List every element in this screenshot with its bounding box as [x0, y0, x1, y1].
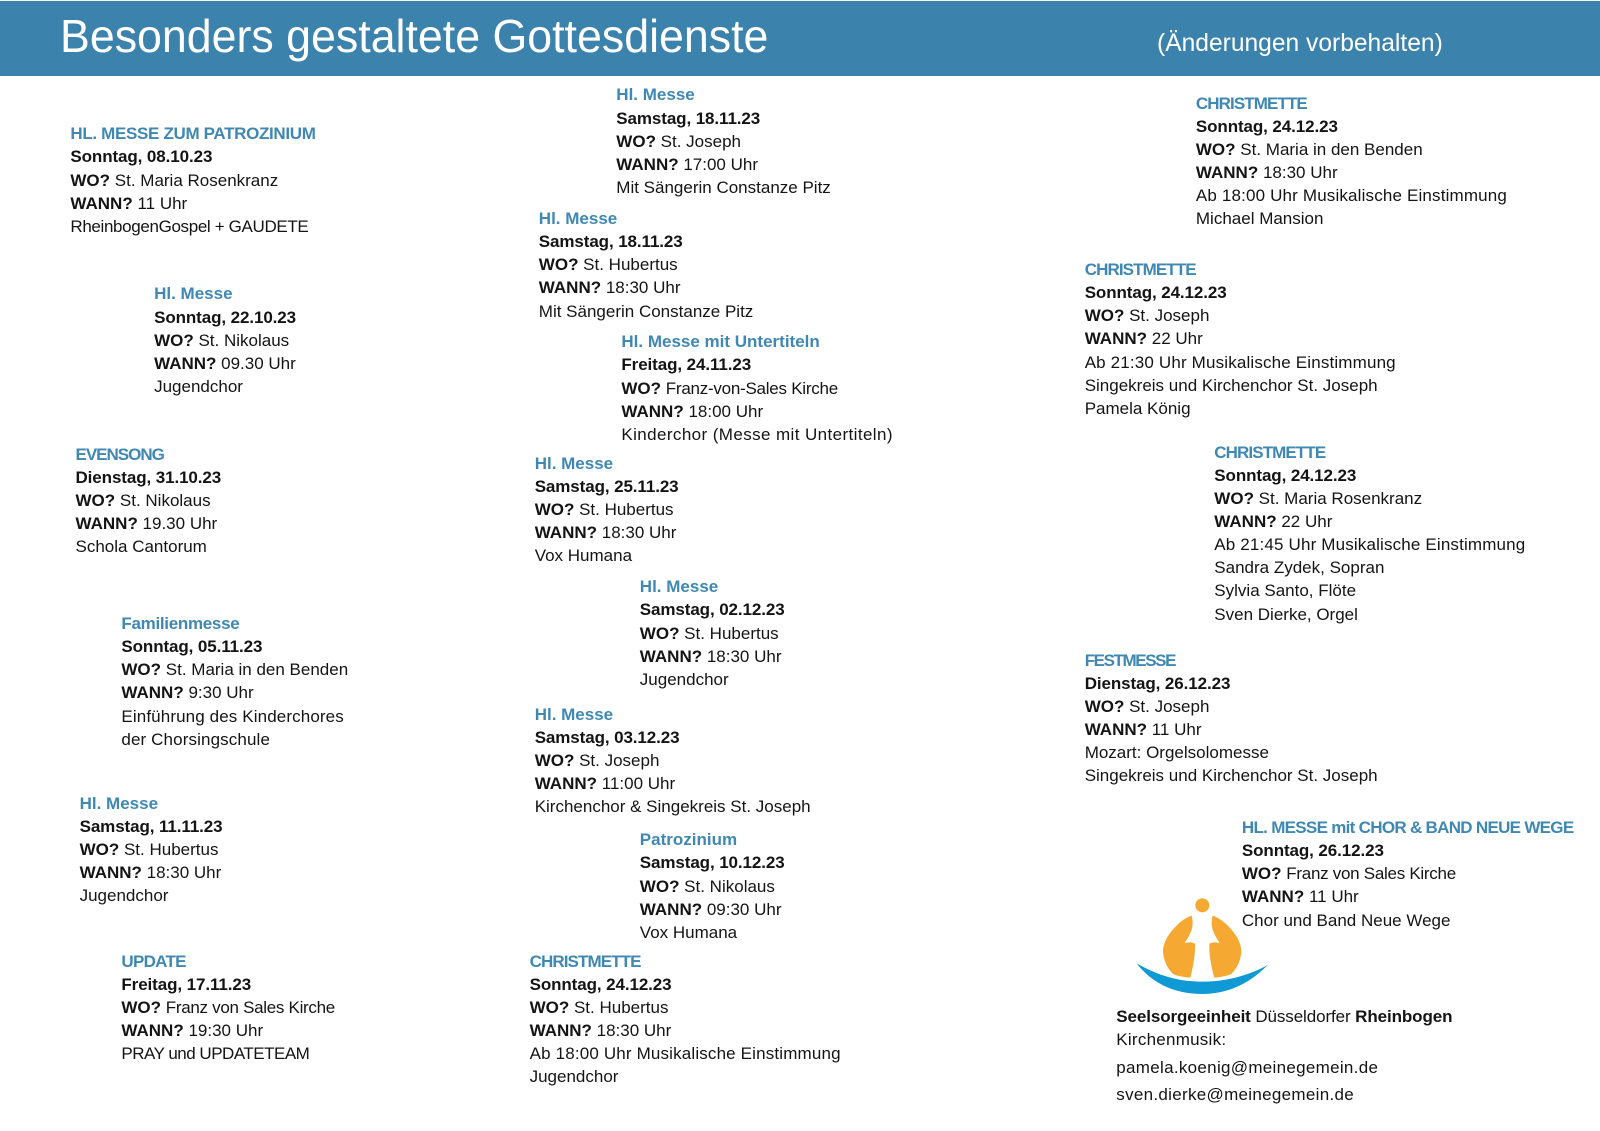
heading: HL. MESSE ZUM PATROZINIUM [70, 124, 316, 143]
details: Schola Cantorum [76, 537, 207, 556]
service: Hl. Messe 02.12. [640, 577, 785, 689]
details: Sonntag, 08.10.23 [70, 147, 212, 166]
details: WO? St. Nikolaus [76, 491, 211, 510]
details [538, 232, 753, 321]
details: Michael Mansion [1196, 209, 1323, 228]
details [530, 975, 841, 1086]
details: WANN? 18:30 Uhr [539, 278, 681, 297]
details: WO? Franz von Sales Kirche [1242, 864, 1456, 883]
details: Sonntag, 26.12.23 [1242, 841, 1384, 860]
details: Vox Humana [535, 546, 632, 565]
details: Kirchenchor & Singekreis St. Joseph [535, 797, 811, 816]
details: WO? St. Maria in den Benden [1196, 140, 1423, 159]
details: WANN? 09:30 Uhr [640, 900, 782, 919]
details [640, 853, 785, 942]
details [621, 355, 893, 444]
email Sven: sven.dierke@meinegemein.de [1116, 1085, 1354, 1104]
heading: Hl. Messe [640, 577, 718, 596]
details [534, 477, 679, 565]
details [80, 817, 223, 905]
details: WO? St. Hubertus [535, 500, 674, 519]
heading: UPDATE [121, 952, 186, 971]
details: WO? St. Nikolaus [640, 877, 775, 896]
details: Sonntag, 24.12.23 [1085, 283, 1227, 302]
details [1242, 841, 1456, 930]
details: Sandra Zydek, Sopran [1214, 558, 1384, 577]
details: Samstag, 10.12.23 [640, 853, 785, 872]
service: Patrozinium [640, 830, 785, 942]
service: Hl. Messe mit Chor & Band Neue Wege [1242, 818, 1574, 930]
details: WANN? 19.30 Uhr [76, 514, 217, 533]
details: WO? St. Hubertus [80, 840, 218, 859]
heading: Hl. Messe [539, 209, 617, 228]
details: WANN? 19:30 Uhr [121, 1021, 263, 1040]
details: WO? Franz von Sales Kirche [121, 998, 335, 1017]
details: Jugendchor [80, 886, 168, 905]
details: Ab 18:00 Uhr Musikalische Einstimmung [1196, 186, 1507, 205]
details: Freitag, 17.11.23 [121, 975, 251, 994]
details: Freitag, 24.11.23 [621, 355, 751, 374]
details: WANN? 17:00 Uhr [616, 155, 758, 174]
details: Sonntag, 24.12.23 [1196, 117, 1338, 136]
heading: Patrozinium [640, 830, 737, 849]
details: WANN? 09.30 Uhr [154, 354, 296, 373]
details: Singekreis und Kirchenchor St. Joseph [1085, 766, 1378, 785]
details: Sven Dierke, Orgel [1214, 605, 1358, 624]
service: Christmette St. Maria in den Benden [1196, 94, 1507, 228]
heading: HL. MESSE mit CHOR & BAND NEUE WEGE [1242, 818, 1573, 837]
service: Familienmesse [121, 614, 348, 749]
service: Hl. Messe zum Patrozinium [70, 124, 316, 236]
service: Hl. Messe 11.11. [80, 794, 223, 905]
service: Christmette St. Maria Rosenkranz [1214, 442, 1525, 624]
heading: CHRISTMETTE [530, 952, 641, 971]
details: WANN? 18:30 Uhr [530, 1021, 671, 1040]
details: Jugendchor [530, 1067, 618, 1086]
service: Festmesse [1084, 651, 1378, 785]
contact block [1116, 1007, 1452, 1104]
service: Hl. Messe 03.12. [534, 705, 811, 816]
details [121, 975, 335, 1063]
note: subject to change: (Änderungen vorbehalten) [1157, 30, 1443, 57]
details: WANN? 18:30 Uhr [640, 647, 782, 666]
organisation name: Seelsorgeeinheit Düsseldorfer Rheinbogen [1116, 1007, 1452, 1026]
details [616, 109, 831, 197]
details: Jugendchor [640, 670, 729, 689]
details: Sonntag, 22.10.23 [154, 308, 296, 327]
music label: Kirchenmusik: [1116, 1030, 1226, 1049]
service: Christmette St. Hubertus [530, 952, 841, 1086]
details: WANN? 18:30 Uhr [80, 863, 221, 882]
details: Einführung des Kinderchores [121, 707, 344, 726]
service: Hl. Messe 18.11. St. Hubertus [538, 209, 753, 321]
details [534, 728, 811, 816]
details: Singekreis und Kirchenchor St. Joseph [1085, 376, 1378, 395]
details: Ab 18:00 Uhr Musikalische Einstimmung [530, 1044, 841, 1063]
service: Evensong [76, 445, 221, 556]
details: WO? St. Maria Rosenkranz [70, 170, 278, 190]
details: WO? Franz-von-Sales Kirche [621, 379, 838, 398]
details: WO? St. Maria Rosenkranz [1214, 489, 1422, 508]
service: Update [121, 952, 335, 1063]
details [76, 468, 221, 556]
details: Samstag, 03.12.23 [535, 728, 679, 747]
details [640, 600, 785, 689]
details: WO? St. Hubertus [530, 998, 668, 1017]
details: Sonntag, 05.11.23 [121, 637, 262, 656]
details: WANN? 11 Uhr [1242, 887, 1359, 906]
details: WANN? 11:00 Uhr [535, 774, 675, 793]
header band [0, 1, 1600, 76]
details: WANN? 18:30 Uhr [1196, 163, 1338, 182]
details: Samstag, 25.11.23 [535, 477, 679, 496]
details: WO? St. Hubertus [539, 255, 678, 274]
heading: CHRISTMETTE [1085, 260, 1196, 279]
details: Sonntag, 24.12.23 [1214, 466, 1356, 485]
heading: Hl. Messe [535, 454, 613, 473]
details: Samstag, 18.11.23 [616, 109, 760, 128]
heading: FESTMESSE [1085, 651, 1175, 670]
heading: Hl. Messe [80, 794, 158, 813]
details [1084, 674, 1378, 785]
service: Hl. Messe mit Untertiteln [621, 332, 893, 444]
details: Chor und Band Neue Wege [1242, 911, 1450, 930]
details [1196, 117, 1507, 228]
details [70, 147, 308, 236]
details: Dienstag, 31.10.23 [76, 468, 221, 487]
details: Sylvia Santo, Flöte [1214, 581, 1356, 600]
details: Dienstag, 26.12.23 [1085, 674, 1230, 693]
service: Hl. Messe 18.11. St. Joseph [616, 85, 831, 197]
service: Christmette St. Joseph [1084, 260, 1396, 418]
details: Jugendchor [154, 377, 243, 396]
details: Mit Sängerin Constanze Pitz [539, 302, 753, 321]
details: Mozart: Orgelsolomesse [1085, 743, 1269, 762]
details: WANN? 18:00 Uhr [621, 402, 763, 421]
details: WANN? 18:30 Uhr [535, 523, 676, 542]
details: WANN? 9:30 Uhr [121, 683, 254, 702]
details: WO? St. Joseph [1085, 306, 1209, 325]
details: WO? St. Joseph [535, 751, 659, 770]
details: WO? St. Nikolaus [154, 331, 289, 350]
details: Pamela König [1085, 399, 1191, 418]
service: Hl. Messe 25.11. [534, 454, 679, 565]
service: Hl. Messe 22.10. [154, 284, 296, 396]
icon: Seelsorgeeinheit logo [1136, 898, 1268, 994]
details: RheinbogenGospel + GAUDETE [70, 217, 308, 236]
details: WANN? 11 Uhr [70, 194, 187, 213]
details: WO? St. Joseph [1085, 697, 1209, 716]
details: WANN? 11 Uhr [1085, 720, 1202, 739]
details [1214, 466, 1525, 624]
heading: Hl. Messe [535, 705, 613, 724]
heading: Hl. Messe [154, 284, 233, 303]
details: der Chorsingschule [121, 730, 270, 749]
details: Vox Humana [640, 923, 737, 942]
details: WO? St. Joseph [616, 132, 741, 151]
details: WANN? 22 Uhr [1085, 329, 1203, 348]
heading: Familienmesse [121, 614, 239, 633]
heading: CHRISTMETTE [1196, 94, 1307, 113]
details: WANN? 22 Uhr [1214, 512, 1332, 531]
heading: Hl. Messe [616, 85, 695, 104]
details [1084, 283, 1396, 418]
details: Mit Sängerin Constanze Pitz [616, 178, 831, 197]
details: PRAY und UPDATETEAM [121, 1044, 309, 1063]
details [154, 308, 296, 396]
title: Besonders gestaltete Gottesdienste [60, 10, 768, 62]
heading: Hl. Messe mit Untertiteln [621, 332, 820, 351]
details: WO? St. Hubertus [640, 624, 779, 642]
details: Samstag, 18.11.23 [539, 232, 683, 251]
details: Sonntag, 24.12.23 [530, 975, 672, 994]
email Pamela: pamela.koenig@meinegemein.de [1116, 1058, 1378, 1077]
details: Samstag, 11.11.23 [80, 817, 223, 836]
heading: EVENSONG [76, 445, 164, 464]
details: Ab 21:45 Uhr Musikalische Einstimmung [1214, 535, 1525, 554]
details: WO? St. Maria in den Benden [121, 660, 348, 679]
details: Ab 21:30 Uhr Musikalische Einstimmung [1085, 353, 1396, 372]
heading: CHRISTMETTE [1214, 442, 1325, 462]
details: Samstag, 02.12.23 [640, 600, 785, 619]
details [121, 637, 348, 749]
details: Kinderchor (Messe mit Untertiteln) [621, 425, 893, 444]
